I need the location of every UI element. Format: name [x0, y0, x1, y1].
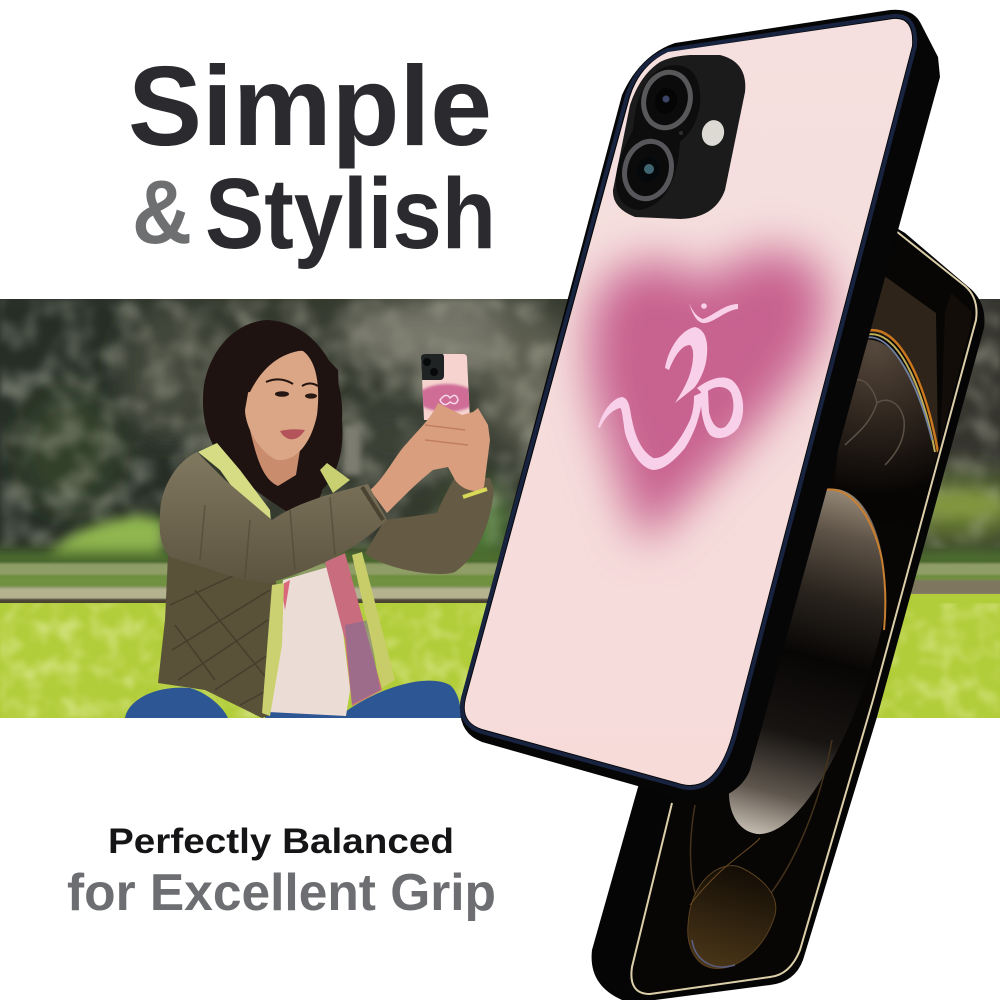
om right bowl — [697, 377, 743, 438]
black case body — [460, 10, 940, 802]
eyes — [275, 391, 289, 397]
wallpaper star curves — [845, 380, 904, 465]
om dot — [701, 303, 707, 309]
back phone with gold screen — [592, 226, 1000, 1000]
front phone case — [460, 10, 940, 802]
lamp post in distance — [343, 425, 361, 475]
lips — [280, 429, 305, 439]
hair fringe — [248, 350, 339, 392]
lawn and path — [0, 563, 1000, 718]
caption — [67, 822, 496, 922]
caption line 1: Perfectly Balanced — [108, 822, 454, 861]
jeans — [125, 688, 228, 718]
rainbow arc — [864, 330, 938, 452]
near arm — [160, 452, 387, 583]
bright bush left — [0, 493, 1000, 568]
hair back — [203, 320, 343, 517]
om crescent — [689, 303, 738, 323]
flash — [699, 118, 727, 148]
photo band: park background — [0, 280, 1000, 718]
selfie phone — [421, 354, 470, 420]
ampersand: & — [132, 163, 192, 263]
white shirt — [268, 565, 350, 716]
caption line 2: for Excellent Grip — [67, 864, 496, 922]
upper lens — [638, 67, 696, 133]
yellow cuff — [463, 489, 487, 497]
hands — [370, 403, 490, 513]
lower lens — [618, 136, 678, 204]
collar left — [198, 443, 271, 522]
camera module — [613, 55, 745, 219]
main lit swirl — [729, 489, 886, 834]
title word: Stylish: Stylish — [205, 158, 496, 270]
woman taking selfie — [125, 320, 494, 718]
om tail — [598, 392, 703, 470]
torso jacket — [158, 555, 278, 718]
quilting lines — [170, 575, 270, 705]
gold frame line — [631, 231, 977, 994]
neck — [250, 430, 300, 486]
plaid shirt — [325, 553, 382, 706]
yellow lining left — [262, 583, 284, 716]
blurred pink heart — [589, 251, 826, 545]
pink back plate — [465, 19, 912, 785]
om symbol — [598, 303, 743, 470]
navy bezel line — [462, 16, 915, 788]
lens island — [616, 65, 700, 210]
screen wallpaper — [687, 277, 972, 969]
far arm — [365, 477, 494, 574]
title — [128, 43, 496, 270]
arc interior — [836, 340, 938, 480]
large faint oval — [690, 740, 833, 894]
om upper arc — [665, 327, 707, 403]
collar right — [320, 463, 350, 493]
lower oval — [688, 866, 776, 968]
yellow lining right — [352, 552, 395, 688]
face — [245, 351, 318, 460]
title word: Simple: Simple — [128, 43, 492, 169]
